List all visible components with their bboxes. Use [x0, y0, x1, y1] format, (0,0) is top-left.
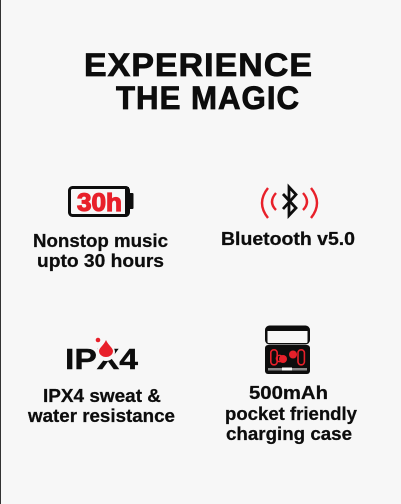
text: battery feature: Nonstop music	[33, 231, 168, 251]
title: THE MAGIC	[116, 80, 300, 116]
title	[84, 47, 313, 116]
icon: bluetooth signal	[262, 187, 317, 218]
icon: IPX4 droplet: IPX4	[65, 344, 138, 376]
text: IPX4 feature	[27, 386, 175, 426]
text: charging case feature: charging case	[226, 424, 352, 444]
text: charging case feature: pocket friendly	[225, 404, 357, 424]
text: IPX4 feature: water resistance	[27, 406, 175, 426]
text: battery feature	[33, 231, 168, 271]
text: IPX4 feature: IPX4 sweat &	[43, 386, 161, 406]
icon: charging case	[265, 326, 310, 374]
text: battery feature: upto 30 hours	[37, 251, 164, 271]
text: charging case feature: 500mAh	[249, 383, 328, 403]
text: bluetooth feature: Bluetooth v5.0	[221, 229, 355, 249]
icon: battery 30h	[70, 187, 134, 217]
icon: battery 30h: 30h	[77, 189, 122, 217]
text: charging case feature	[225, 383, 357, 444]
title: EXPERIENCE	[84, 47, 313, 83]
